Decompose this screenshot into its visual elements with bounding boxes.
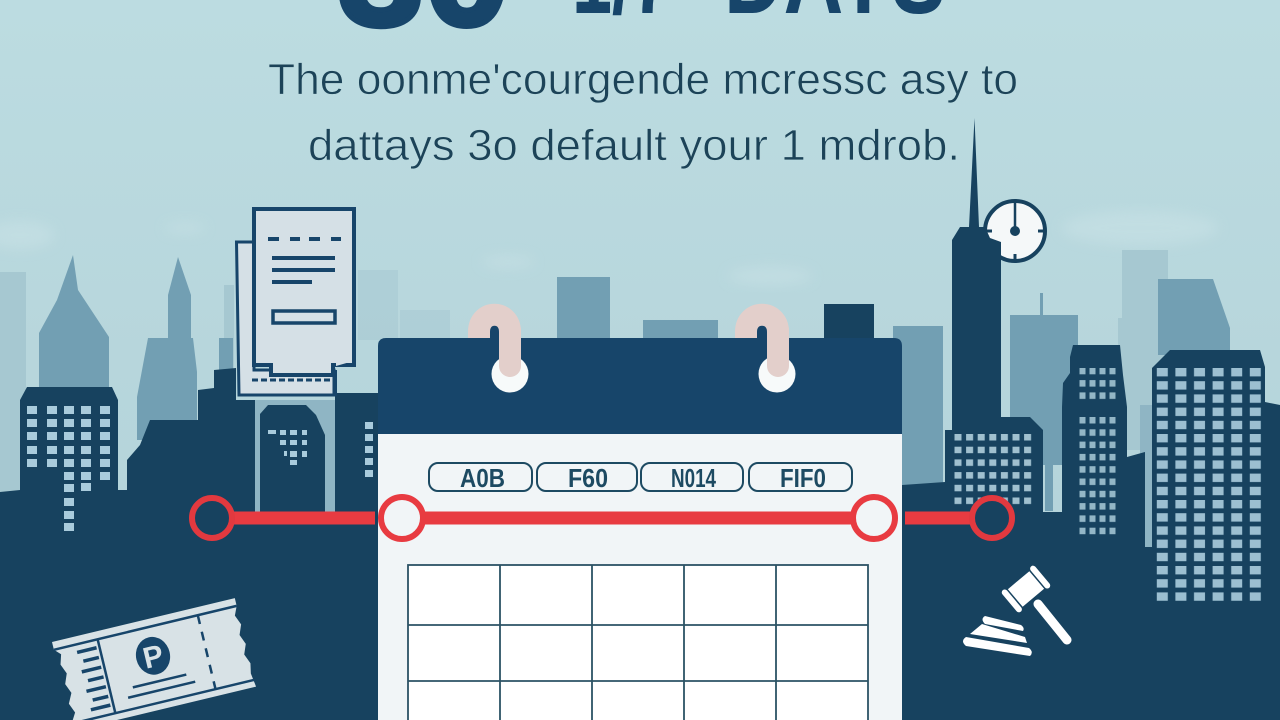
calendar: N014: [671, 463, 716, 493]
subtitle text: The oonme'courgende mcressc asy to: [268, 55, 1018, 104]
calendar rings back limbs: [479, 315, 778, 345]
clouds: [0, 211, 1218, 285]
month labels: [429, 463, 852, 491]
windows: left tower: [27, 406, 110, 531]
calendar: F60: [568, 463, 608, 493]
icon: clock: [960, 201, 1045, 262]
windows: right tower: [1156, 368, 1264, 601]
calendar: [378, 330, 902, 720]
binding holes: [492, 356, 796, 392]
skyline: faint distant buildings: [0, 250, 1168, 547]
windows: right block: [954, 434, 1034, 508]
calendar: FIF0: [780, 463, 826, 493]
windows: left small building: [268, 430, 307, 465]
icon: parking ticket: P: [140, 639, 167, 676]
subtitle text: dattays 3o default your 1 mdrob.: [308, 121, 960, 170]
binding rings: [510, 330, 778, 366]
icon: parking ticket: [52, 598, 256, 720]
title: [338, 0, 946, 58]
windows: mid tower: [1079, 368, 1119, 540]
timeline: [192, 497, 1012, 539]
skyline: mid-tone buildings: [39, 255, 1230, 512]
date grid: [408, 565, 868, 720]
icon: document: [236, 209, 354, 396]
calendar header: [378, 338, 902, 434]
subtitle text: [268, 55, 1018, 170]
calendar: A0B: [460, 463, 505, 493]
icon: gavel: [963, 564, 1067, 656]
calendar body: [378, 434, 902, 720]
windows: strip beside calendar: [365, 422, 373, 477]
